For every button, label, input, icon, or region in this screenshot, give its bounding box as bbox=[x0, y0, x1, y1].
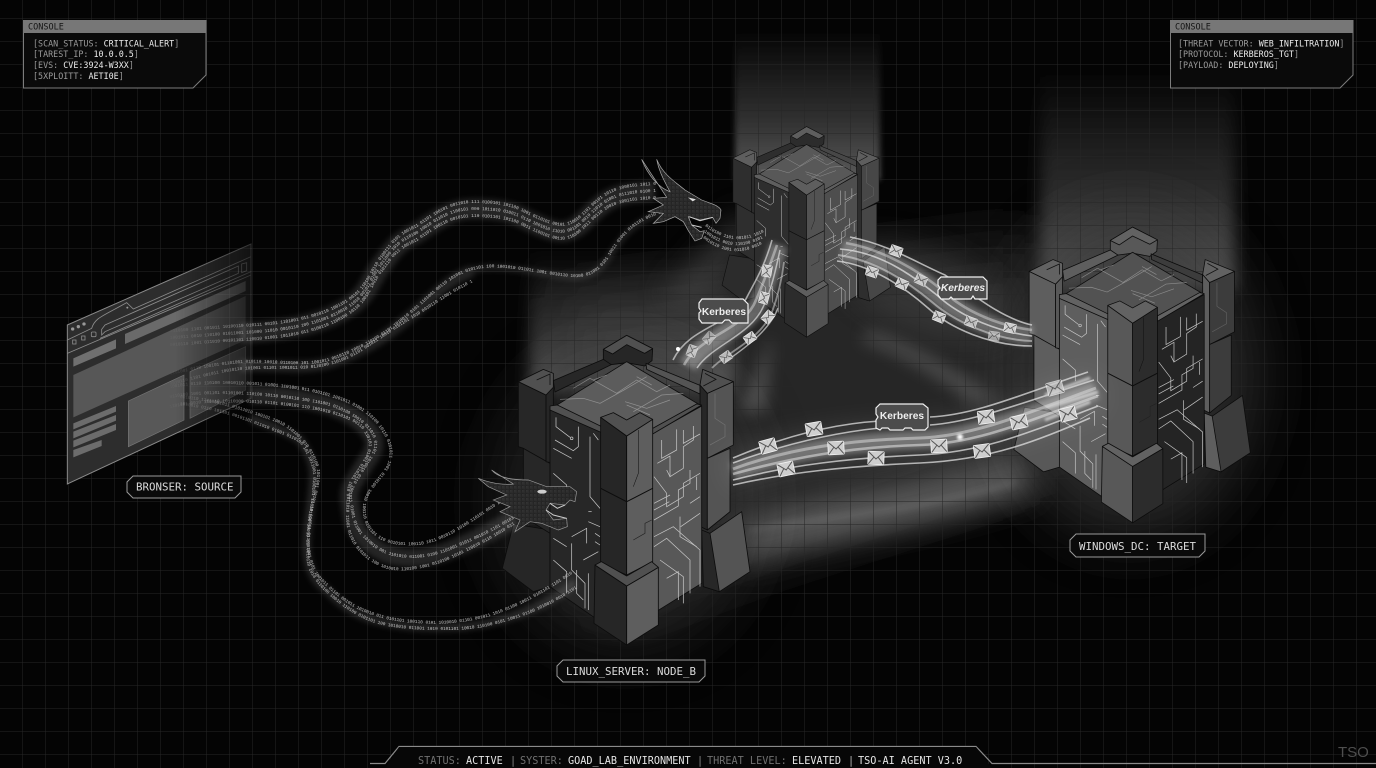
label: windows dc bbox=[1070, 534, 1205, 557]
binary stream: upper pair to top dragon bbox=[174, 180, 662, 384]
label: linux server bbox=[557, 660, 705, 682]
console: right bbox=[1170, 20, 1354, 88]
tower: linux server bbox=[502, 335, 750, 645]
binary stream: upper pair to top dragon: 1001011 0010 110100 01011001 101000 11010 0010110 100 1101001 0110010 11010 001011 01001 1011000 1010 0110100 10010 011010 1100101 000 1011010 010011 0110 1001010 11010 001101 0010 11010 01001 0111010 0100 1101 0010110 1001 0101101 0010 10010 11010 010 110100 1001 0110 10010 1101 001010 1101 bbox=[174, 189, 656, 338]
binary stream: lower trio to bottom dragon: 1101001 0010 110010 10110100 010110 01101 0100101 110 1001010 0110101 00110 110101 01001 0110101 1010 0011010 11001 011010 0101011 100 1010010 110100 1001 0110100 10101 110010 0110 10010 01101 1001011 0101 0110 1001010 0101 1010010 0110 11010 bbox=[174, 399, 514, 570]
binary stream: lower trio to bottom dragon: 1010010 0110 101101 00101101 011010 01001 0110100 101 1011001 0100101 11010 010011 01101 0010110 1010 0110100 10010 110100 0101101 100 1010010 011001 1010 0101101 10010 110100 0101 10011 01100 1010010 0010 1101 0101100 1001 0110101 1001 0101 110010 1101 01101 0010 101100 0110 bbox=[180, 402, 576, 630]
status bar: | bbox=[510, 756, 516, 767]
status bar: ELEVATED bbox=[792, 756, 841, 767]
console: right: [THREAT VECTOR: WEB_INFILTRATION] bbox=[1178, 38, 1344, 48]
console: right: [PAYLOAD: DEPLOYING] bbox=[1178, 60, 1279, 70]
console: left: [TAREST_IP: 10.0.0.5] bbox=[33, 49, 139, 59]
panel: browser source bbox=[67, 244, 251, 484]
status bar: | bbox=[848, 756, 854, 767]
kerberos tag: linux to windows: Kerberes bbox=[880, 411, 924, 422]
console: right: [PROTOCOL: KERBEROS_TGT] bbox=[1178, 49, 1299, 59]
label: linux server: LINUX_SERVER: NODE_B bbox=[566, 665, 696, 678]
label: windows dc: WINDOWS_DC: TARGET bbox=[1079, 540, 1197, 553]
console: left bbox=[23, 20, 206, 88]
label: browser source bbox=[127, 476, 241, 498]
binary stream: lower trio to bottom dragon: 0010110 1101 001011 01011010 100101 10010 1101001 010 0110100 1011001 00101 101100 10010 1101001 0101 1001011 01101 001011 1010010 011 0101101 100110 0101 1010010 01101 001011 1010 01100 10011 0101101 1101 0010 1010011 0110 1001010 0110 1010 001101 0010 10110 0101 110100 1001 bbox=[180, 395, 572, 624]
dragon: bottom bbox=[478, 470, 577, 532]
data stream: linux to windows bbox=[733, 372, 1098, 485]
watermark: TSO bbox=[1338, 744, 1369, 761]
status bar bbox=[370, 746, 1376, 768]
status bar: | bbox=[697, 756, 703, 767]
label: browser source: BRONSER: SOURCE bbox=[136, 480, 234, 494]
kerberos tag: linux to node bbox=[699, 299, 748, 323]
binary stream: upper pair to top dragon: 0110100 1101 001011 10100110 010111 00101 1101001 011 0010110 1001101 00101 110100 10110 0100111 0101 1001011 01101 100101 0011010 111 0100101 101100 1001 0110101 00101 110010 1101 00101 10110 1000101 1011 0010 1101001 0110 1010010 1101 01101 00101 101 001011 0110 1001 01101 0010 110101 0010 bbox=[174, 182, 656, 332]
status bar: THREAT LEVEL: bbox=[707, 756, 787, 767]
data stream: node to windows bbox=[837, 237, 1032, 346]
console: left: [5XPLOITT: AETI0E] bbox=[33, 71, 124, 81]
kerberos tag: node to windows bbox=[938, 277, 987, 299]
console: right: CONSOLE bbox=[1175, 22, 1211, 32]
binary stream: lower trio to bottom dragon: 0110100 1001 001101 01101001 110100 10110 0010110 100 1101001 0110100 10010 011010 01101 1010010 0110 1001011 01001 011001 1010010 001 1101010 011001 0100 1101001 01011 001010 1101 00101 10110 0101101 0010 1101 0010110 1001 1010110 0101 10010 bbox=[176, 391, 514, 558]
dragon: top bbox=[642, 159, 721, 241]
browser chrome bbox=[67, 257, 251, 353]
status bar: STATUS: bbox=[418, 756, 461, 767]
dragon breath stream bbox=[704, 224, 764, 252]
dragon breath stream: 1001011 0010 110100 010110 1001 bbox=[704, 230, 763, 246]
kerberos tag: node to windows: Kerberes bbox=[941, 283, 985, 294]
status bar: TSO-AI AGENT V3.0 bbox=[858, 756, 962, 767]
console: left: [EVS: CVE:3924-W3XX] bbox=[33, 60, 134, 70]
console: left: CONSOLE bbox=[28, 22, 64, 32]
tower: node top bbox=[722, 127, 890, 337]
console: left: [SCAN_STATUS: CRITICAL_ALERT] bbox=[33, 38, 179, 48]
kerberos tag: linux to windows bbox=[876, 404, 928, 430]
binary stream: upper pair to top dragon: 0010110 1101 001011 10010110 101001 01101 1001011 010 0110100 1101001 01101 001011 10010 0101101 1010 0010110 11001 010110 1010010 011 0110101 100100 0110 1101001 01011 100110 1010 01100 10110 1010010 1101 0010 1001011 0110 bbox=[176, 280, 472, 384]
data stream: linux to node bbox=[673, 240, 784, 368]
status bar: ACTIVE bbox=[466, 756, 503, 767]
status bar: GOAD_LAB_ENVIRONMENT bbox=[568, 756, 691, 767]
binary stream: lower trio to bottom dragon bbox=[174, 381, 576, 633]
status bar: SYSTER: bbox=[520, 756, 563, 767]
kerberos tag: linux to node: Kerberes bbox=[702, 307, 746, 318]
tower: windows dc bbox=[1014, 227, 1250, 523]
binary stream: lower trio to bottom dragon: 1001011 0110 110100 10010110 001011 01001 1101001 011 0101101 1001011 01001 110100 10110 0101011 1001 0110100 10010 100110 0101101 110 0010101 100110 1011 0010110 10100 110101 0010 11010 01001 1010010 1101 0010 1101001 0110 0101001 1101 01001 bbox=[174, 381, 500, 546]
dragon breath stream: 0110100 1101 001011 101001 0110 bbox=[706, 224, 764, 240]
ambient glow and light columns bbox=[495, 30, 1255, 650]
binary stream: upper pair to top dragon: 0010110 1001 011010 00101101 110010 01001 1011010 011 0100110 1100100 10110 100101 10010 0101110 0011 1001011 01101 100110 0010101 110 0101101 101100 0011 1100101 00110 110100 1011 00110 10010 1001101 1010 0011 0100101 1100 1001011 0110 01001 10110 101 001011 0110 1001 01101 0010 110101 0010 bbox=[174, 196, 656, 346]
binary stream: upper pair to top dragon: 1101001 0110 100101 01101001 010110 10010 0110100 101 1001011 0010110 10010 110100 01101 1010010 0101 1101001 00110 101001 0101101 100 1001010 011011 1001 0010110 10100 011001 0101 10011 01001 0101101 0010 1101 0110100 1001 0101001 0110 10110 00110 010 110011 0100 1001 00110 1010 010011 1010 bbox=[174, 212, 661, 374]
page blocks bbox=[73, 339, 116, 367]
